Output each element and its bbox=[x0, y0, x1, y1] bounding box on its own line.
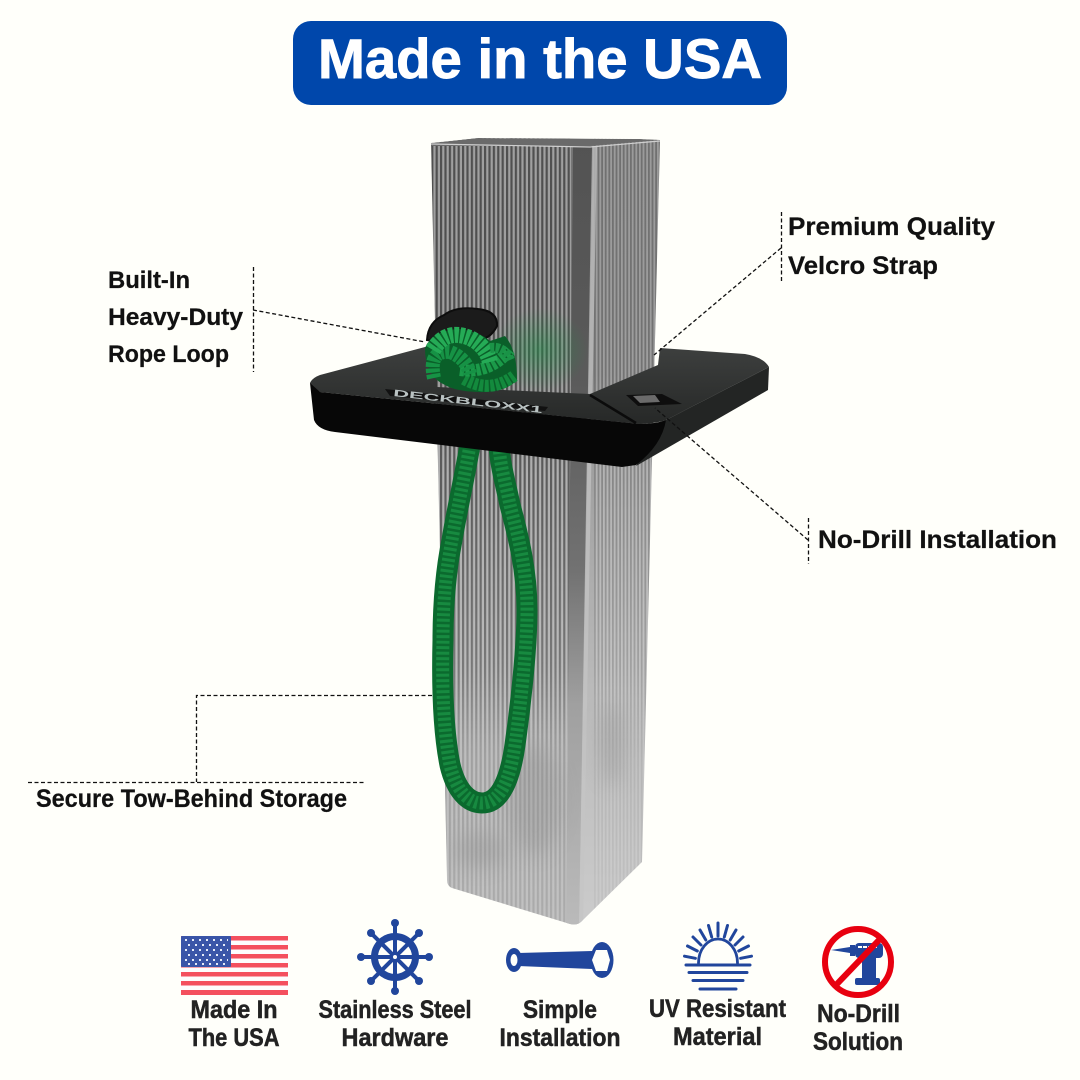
label: Installation bbox=[500, 1024, 620, 1052]
aluminum post bbox=[431, 130, 665, 930]
callout: rope loop: Built-In bbox=[108, 267, 190, 294]
label bbox=[188, 996, 280, 1052]
label: Stainless Steel bbox=[318, 996, 472, 1024]
title banner bbox=[293, 21, 787, 105]
icon: wrench bbox=[506, 942, 614, 978]
label bbox=[500, 996, 620, 1052]
callout: velcro strap: Premium Quality bbox=[788, 213, 995, 241]
label: Made In bbox=[190, 996, 278, 1024]
label: No-Drill bbox=[817, 1000, 900, 1028]
brand logo: DECKBLOXX1 bbox=[393, 388, 545, 416]
feature: simple installation bbox=[500, 942, 620, 1052]
callout: no-drill installation: No-Drill Installation bbox=[818, 526, 1057, 554]
callout: rope loop bbox=[108, 267, 244, 368]
countersunk screw hole bbox=[626, 394, 682, 406]
feature: made in the USA bbox=[181, 936, 288, 1052]
icon: sun over water bbox=[684, 923, 752, 989]
feature: UV resistant material bbox=[649, 923, 787, 1051]
callout: velcro strap: Velcro Strap bbox=[788, 252, 938, 280]
plate front edge bbox=[310, 383, 666, 467]
callout: rope loop: Heavy-Duty bbox=[108, 304, 244, 331]
label: Solution bbox=[813, 1028, 903, 1056]
icon: crossed-out drill bbox=[825, 929, 891, 995]
callout: tow-behind storage: Secure Tow-Behind Storage bbox=[36, 785, 347, 813]
plate top surface bbox=[310, 347, 769, 424]
callout leader lines bbox=[28, 212, 808, 782]
icon: US flag bbox=[181, 936, 288, 995]
label: Material bbox=[673, 1023, 762, 1051]
knot strands bbox=[464, 376, 514, 386]
label bbox=[318, 996, 472, 1052]
rope knot bbox=[425, 308, 517, 392]
mounting plate bbox=[310, 347, 769, 467]
knot black rope end bbox=[427, 308, 497, 342]
callout: rope loop: Rope Loop bbox=[108, 341, 229, 368]
icon: ship wheel bbox=[357, 919, 433, 995]
label: UV Resistant bbox=[649, 995, 787, 1023]
green rope loop bbox=[443, 445, 527, 803]
logo strip bbox=[385, 389, 548, 411]
plate right edge bbox=[636, 367, 769, 466]
label bbox=[649, 995, 787, 1051]
feature: no-drill solution bbox=[813, 929, 903, 1056]
label: The USA bbox=[188, 1024, 280, 1052]
title banner: Made in the USA bbox=[318, 27, 762, 90]
callout: velcro strap bbox=[788, 213, 995, 280]
knot base bbox=[425, 329, 517, 392]
label: Simple bbox=[523, 996, 597, 1024]
plate seam bbox=[590, 395, 636, 423]
label: Hardware bbox=[342, 1024, 449, 1052]
label bbox=[813, 1000, 903, 1056]
feature: stainless steel hardware bbox=[318, 919, 472, 1052]
